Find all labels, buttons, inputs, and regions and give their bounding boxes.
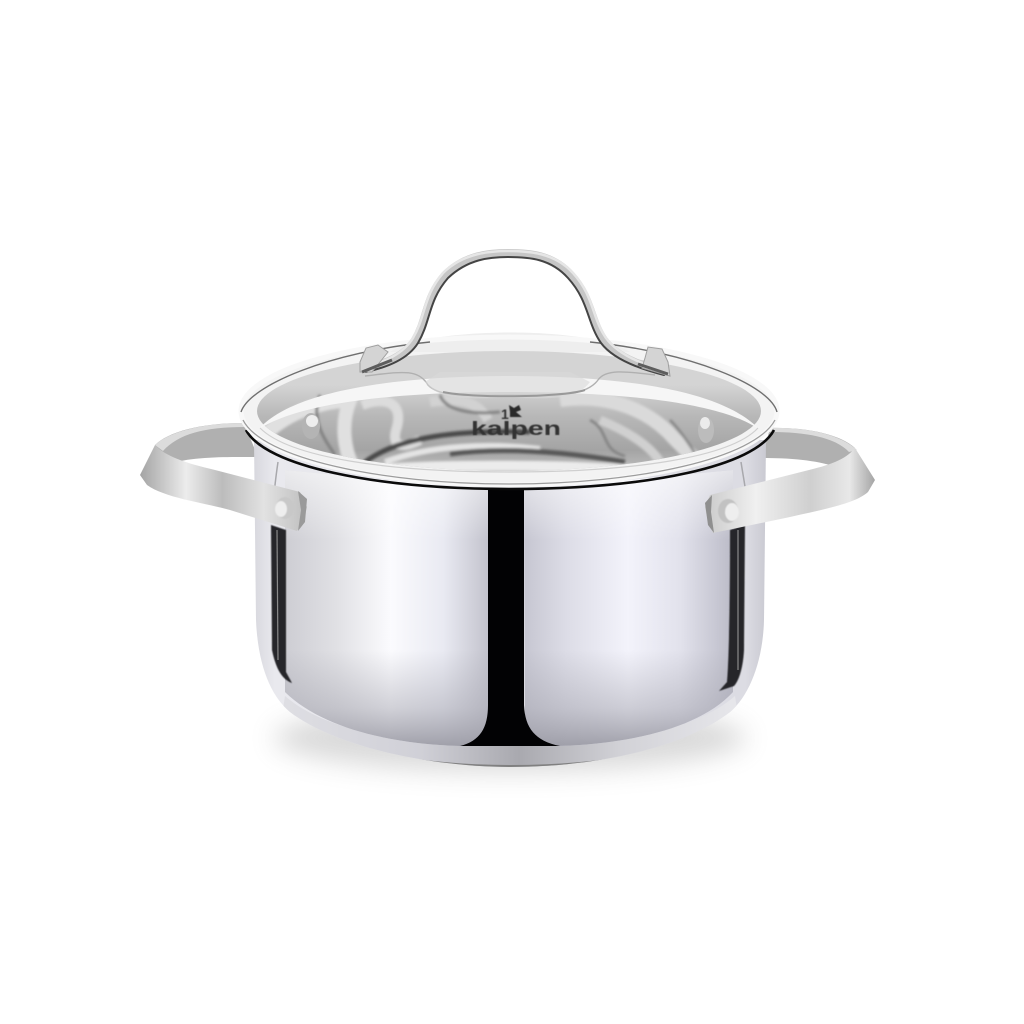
left dark side stripe [271, 525, 292, 683]
product illustration: stainless steel pot [140, 249, 875, 782]
lid logo [471, 405, 561, 440]
logo mark [509, 405, 522, 417]
back of right handle [762, 428, 857, 467]
lid glass upper band [258, 376, 760, 430]
front strap of left handle [140, 445, 307, 531]
base band [282, 696, 738, 767]
lid metal rim [241, 337, 777, 485]
right lid bracket [642, 347, 670, 376]
left lid bracket [360, 345, 388, 372]
pot body [254, 440, 766, 767]
lid handle wire [360, 251, 670, 376]
logo wordmark: kalpen [471, 419, 561, 440]
pot interior seen through glass [257, 351, 761, 471]
central black reflection [460, 488, 560, 746]
right body panel [524, 470, 733, 746]
front strap of right handle [705, 448, 875, 533]
glass lid [241, 251, 777, 489]
lid glass [241, 337, 777, 485]
interior knobs [302, 413, 320, 439]
small rim reflection lines [274, 462, 278, 494]
left rivet [276, 497, 294, 519]
back of left handle [155, 423, 258, 463]
floor shadow [274, 704, 746, 772]
dark seal below lid [246, 430, 774, 489]
right dark side stripe [719, 525, 745, 691]
left body panel [285, 470, 488, 746]
logo capacity numeral: 1 [501, 406, 509, 422]
right rivet [718, 499, 738, 523]
